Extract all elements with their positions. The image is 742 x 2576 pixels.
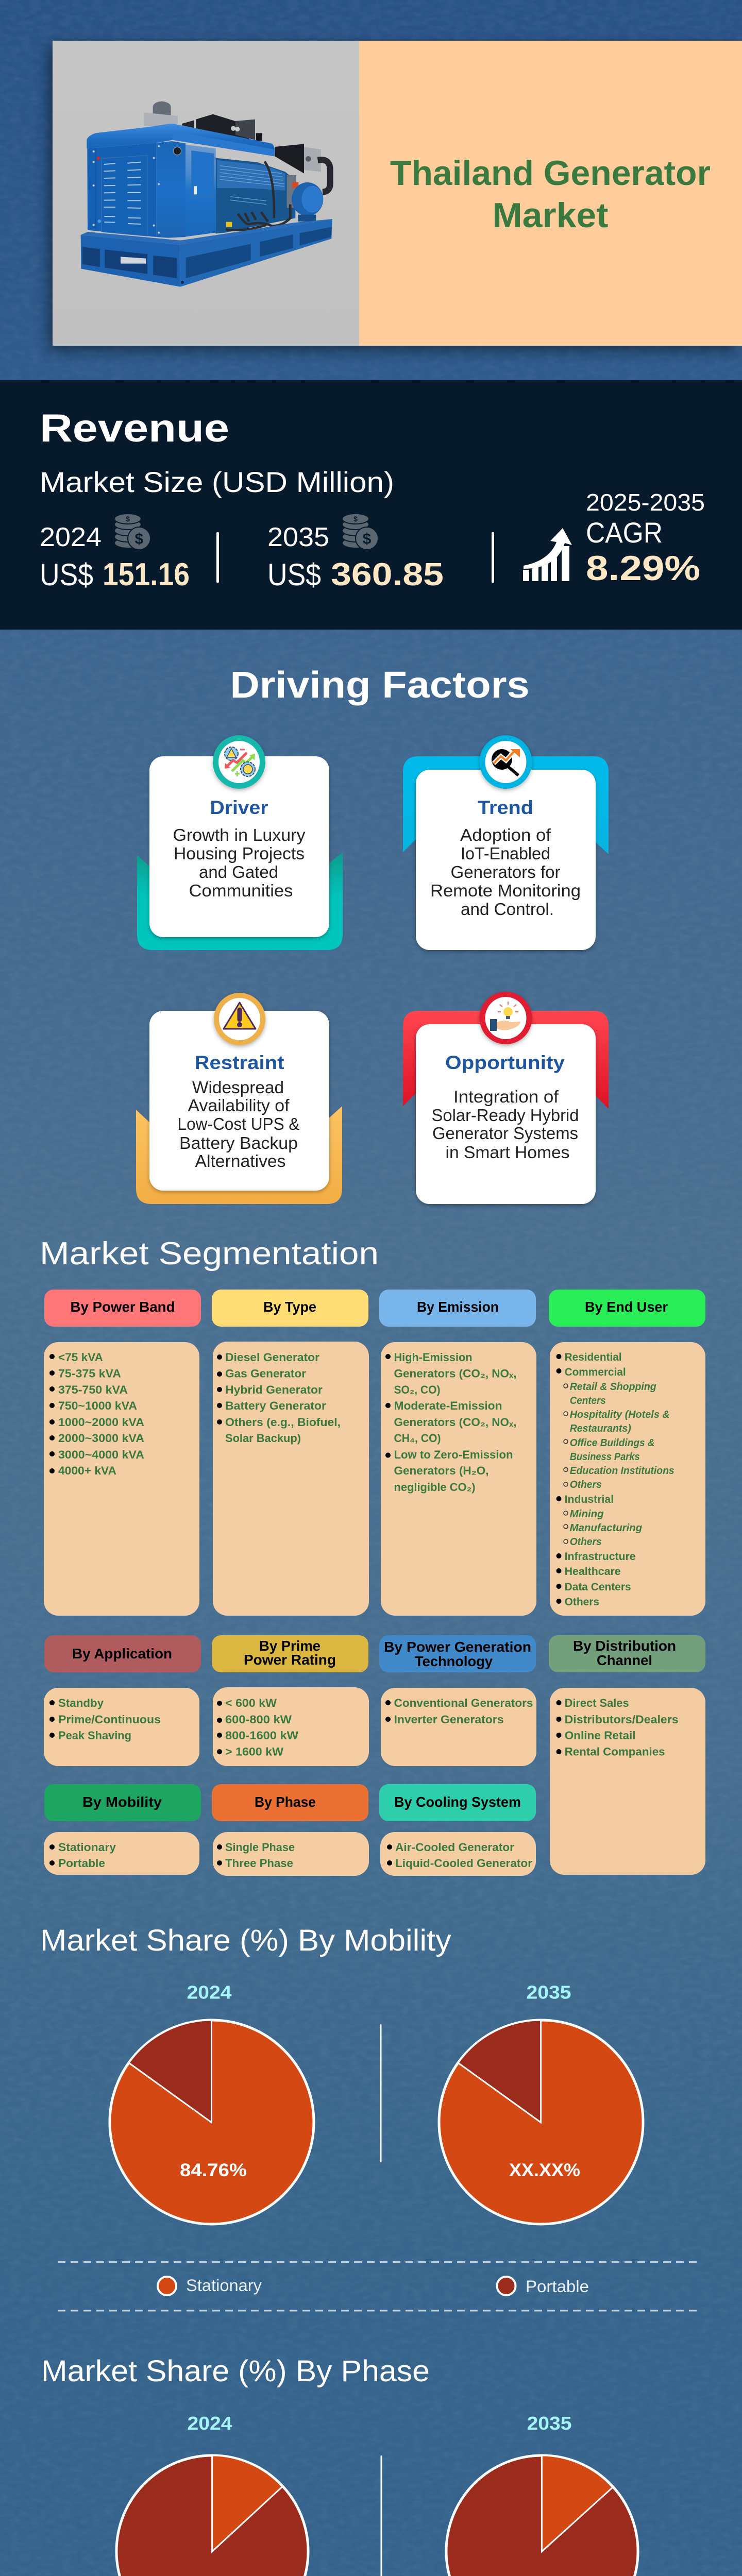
chart: mobility 2024 pie: 2024	[187, 1981, 232, 2003]
heading: market segmentation: Market Segmentation	[40, 1236, 379, 1272]
segment: by distribution channel: Distributors/Dealers	[565, 1713, 679, 1726]
segment: by power band: 1000~2000 kVA	[58, 1416, 144, 1429]
segment: by cooling system: Liquid-Cooled Generator	[395, 1857, 532, 1870]
icon: warning triangle	[214, 993, 265, 1045]
card text: Alternatives	[195, 1151, 285, 1171]
hero image panel	[53, 41, 742, 346]
segment: by type: Battery Generator	[225, 1399, 326, 1412]
skid base	[81, 219, 332, 245]
chart: mobility 2024 pie: 84.76%	[180, 2160, 247, 2180]
segment: by prime power rating: 600-800 kW	[225, 1713, 292, 1726]
illustration: blue diesel generator	[81, 101, 332, 287]
card text: Widespread	[192, 1078, 284, 1097]
segment: by application	[44, 1635, 201, 1766]
segment: by end user: Others	[570, 1479, 602, 1490]
engine block	[216, 158, 295, 233]
segment: by type: Solar Backup)	[225, 1432, 301, 1445]
icon: coins 2035	[342, 514, 378, 550]
segment: by distribution channel: Rental Companies	[565, 1745, 665, 1758]
card text: Adoption of	[460, 825, 551, 844]
stat: 2024: 151.16	[103, 557, 190, 592]
segment: by application: Peak Shaving	[58, 1729, 131, 1742]
segment: by end user: Mining	[570, 1509, 604, 1520]
segment: by emission: Moderate-Emission	[394, 1399, 502, 1412]
segment: by emission: negligible CO₂)	[394, 1481, 475, 1494]
segment: by end user: Data Centers	[565, 1581, 631, 1593]
subheading: market size: Market Size (USD Million)	[40, 466, 394, 498]
segment: by power band: By Power Band	[70, 1299, 175, 1315]
segment: by cooling system	[379, 1784, 536, 1876]
icon: trend magnifier	[479, 735, 532, 789]
segment: by power generation technology: Conventional Generators	[394, 1697, 533, 1709]
segment: by mobility: Portable	[58, 1857, 105, 1870]
divider	[380, 2455, 382, 2576]
segment: by power band: <75 kVA	[58, 1351, 103, 1364]
legend: mobility: Portable	[526, 2277, 589, 2296]
heading: market share by mobility: Market Share (%) By Mobility	[40, 1924, 451, 1957]
icon: coins 2024: $	[126, 515, 130, 523]
segment: by end user: Office Buildings &	[570, 1437, 655, 1449]
segment: by emission: By Emission	[417, 1299, 499, 1315]
segment: by power band: 3000~4000 kVA	[58, 1448, 144, 1461]
divider	[380, 2024, 381, 2162]
segment: by prime power rating: 800-1600 kW	[225, 1729, 298, 1742]
segment: by power band: 2000~3000 kVA	[58, 1432, 144, 1445]
divider	[492, 532, 494, 583]
card text: Integration of	[453, 1087, 559, 1106]
card text	[173, 825, 306, 900]
panel: restraint	[136, 993, 342, 1204]
segment: by power generation technology: By Power Generation	[384, 1639, 531, 1655]
heading: market share by phase: Market Share (%) By Phase	[41, 2354, 430, 2388]
card text	[432, 1087, 579, 1162]
segment: by power band: 750~1000 kVA	[58, 1399, 137, 1412]
segment: by end user: Industrial	[565, 1494, 614, 1505]
panel: revenue	[0, 380, 742, 630]
card text	[430, 825, 581, 919]
segment: by distribution channel: Channel	[597, 1652, 652, 1668]
card text: and Gated	[199, 862, 278, 882]
segment: by end user: Restaurants)	[570, 1423, 631, 1434]
stat: 2024: 2024	[40, 522, 102, 552]
card text: Battery Backup	[179, 1133, 298, 1153]
stat: 2035	[267, 522, 444, 592]
card text	[177, 1078, 300, 1171]
chart: phase 2035 pie	[446, 2413, 638, 2576]
panel: driver	[137, 735, 343, 950]
card text: in Smart Homes	[445, 1143, 570, 1162]
segment: by type: Hybrid Generator	[225, 1383, 323, 1396]
segment: by phase: Single Phase	[225, 1841, 295, 1854]
card text: Generator Systems	[432, 1124, 578, 1143]
icon: coins 2035: $	[353, 515, 358, 523]
segment: by power band	[44, 1290, 201, 1616]
segment: by cooling system: By Cooling System	[394, 1794, 521, 1810]
title: Market	[493, 196, 608, 235]
segment: by distribution channel	[549, 1635, 705, 1875]
segment: by power generation technology	[379, 1635, 536, 1766]
heading: driving factors: Driving Factors	[230, 665, 530, 706]
segment: by emission: Generators (CO₂, NOₓ,	[394, 1367, 516, 1380]
card text: Low-Cost UPS &	[177, 1114, 300, 1133]
segment: by emission: SO₂, CO)	[394, 1383, 440, 1396]
segment: by end user: Education Institutions	[570, 1465, 674, 1477]
card text: Remote Monitoring	[430, 881, 581, 900]
segment: by application: Standby	[58, 1697, 104, 1709]
card text: Communities	[189, 881, 293, 900]
chart: mobility 2024 pie	[110, 1981, 314, 2224]
icon: driver arrows and gears	[213, 735, 265, 789]
segment: by type: By Type	[263, 1299, 316, 1315]
segment: by phase: Three Phase	[225, 1857, 293, 1870]
segment: by emission: Generators (CO₂, NOₓ,	[394, 1416, 516, 1429]
stat: CAGR: CAGR	[586, 516, 663, 549]
vents	[104, 162, 141, 224]
heading: revenue: Revenue	[40, 406, 229, 450]
segment: by type	[212, 1290, 369, 1616]
segment: by end user: Residential	[565, 1351, 622, 1363]
chart: mobility 2035 pie: 2035	[527, 1981, 571, 2003]
segment: by mobility	[44, 1784, 201, 1875]
divider	[216, 532, 219, 583]
chart: mobility 2035 pie	[439, 1981, 643, 2224]
card title: Trend	[478, 797, 533, 818]
icon: coins 2024: $	[135, 531, 144, 548]
icon: growth chart arrow	[523, 528, 572, 581]
top equipment	[153, 101, 171, 115]
segment: by emission: CH₄, CO)	[394, 1432, 441, 1445]
segment: by distribution channel: Online Retail	[565, 1729, 636, 1742]
segment: by type: Diesel Generator	[225, 1351, 319, 1364]
segment: by end user: Others	[565, 1596, 599, 1608]
legend: mobility: Stationary	[186, 2276, 262, 2295]
segment: by power generation technology: Inverter Generators	[394, 1713, 504, 1726]
segment: by end user: Centers	[570, 1395, 606, 1406]
segment: by mobility: Stationary	[58, 1841, 116, 1854]
icon: coins 2024	[114, 514, 150, 550]
segment: by prime power rating: > 1600 kW	[225, 1745, 283, 1758]
segment: by type: Gas Generator	[225, 1367, 306, 1380]
segment: by end user: Retail & Shopping	[570, 1381, 656, 1393]
chart: phase 2035 pie: 2035	[527, 2413, 572, 2434]
segment: by power band: 4000+ kVA	[58, 1464, 116, 1477]
segment: by distribution channel: Direct Sales	[565, 1697, 629, 1709]
details	[173, 147, 181, 155]
chart: mobility 2035 pie: XX.XX%	[509, 2160, 580, 2180]
segment: by power band: 375-750 kVA	[58, 1383, 128, 1396]
panel: opportunity	[403, 992, 609, 1204]
stat: 2035: 2035	[267, 522, 329, 552]
card title: Driver	[210, 797, 268, 818]
segment: by end user: Infrastructure	[565, 1551, 636, 1563]
segment: by end user: Healthcare	[565, 1566, 621, 1578]
enclosure	[87, 143, 156, 237]
card title: Restraint	[195, 1052, 284, 1073]
segment: by end user: Manufacturing	[570, 1522, 642, 1534]
card text: Solar-Ready Hybrid	[432, 1106, 579, 1125]
segment: by phase	[212, 1784, 369, 1876]
segment: by emission	[379, 1290, 536, 1616]
stat: 2035: US$	[267, 557, 321, 592]
segment: by prime power rating: By Prime	[259, 1638, 321, 1654]
card text: Availability of	[188, 1096, 290, 1115]
segment: by end user: Hospitality (Hotels &	[570, 1409, 670, 1420]
card text: Housing Projects	[174, 844, 305, 863]
segment: by end user: Others	[570, 1536, 602, 1548]
segment: by type: Others (e.g., Biofuel,	[225, 1416, 341, 1429]
panel: trend	[403, 735, 609, 950]
segment: by prime power rating	[212, 1635, 369, 1766]
icon: coins 2035: $	[363, 531, 372, 548]
segment: by prime power rating: < 600 kW	[225, 1697, 277, 1709]
stat: 2035: 360.85	[331, 557, 444, 592]
segment: by end user	[549, 1290, 705, 1616]
legend: mobility	[58, 2262, 700, 2311]
stat: CAGR	[586, 489, 705, 588]
segment: by phase: By Phase	[255, 1794, 316, 1810]
segment: by application: By Application	[72, 1646, 172, 1662]
segment: by application: Prime/Continuous	[58, 1713, 161, 1726]
segment: by power generation technology: Technology	[415, 1653, 493, 1669]
panel: hero	[53, 41, 742, 346]
hoses	[226, 161, 290, 230]
segment: by emission: Low to Zero-Emission	[394, 1448, 513, 1461]
stat: 2024	[40, 522, 190, 592]
segment: by end user: By End User	[585, 1299, 668, 1315]
stat: CAGR: 8.29%	[586, 549, 700, 588]
segment: by prime power rating: Power Rating	[244, 1652, 336, 1668]
icon: hand with light bulb	[479, 992, 532, 1044]
chart: phase 2024 pie: 2024	[188, 2413, 232, 2434]
segment: by emission: High-Emission	[394, 1351, 472, 1364]
roof	[87, 124, 275, 156]
card title: Opportunity	[445, 1052, 565, 1073]
segment: by distribution channel: By Distribution	[573, 1638, 676, 1654]
segment: by emission: Generators (H₂O,	[394, 1464, 488, 1477]
rear radiator and pipe	[275, 144, 304, 174]
stat: CAGR: 2025-2035	[586, 489, 705, 516]
alternator	[292, 182, 323, 216]
card text: Growth in Luxury	[173, 825, 306, 844]
card text: and Control.	[461, 900, 554, 919]
title: Thailand Generator	[390, 154, 711, 193]
stat: 2024: US$	[40, 557, 93, 592]
segment: by power band: 75-375 kVA	[58, 1367, 121, 1380]
card text: Generators for	[450, 862, 561, 882]
chart: phase 2024 pie	[116, 2413, 308, 2576]
segment: by mobility: By Mobility	[82, 1794, 162, 1810]
segment: by end user: Business Parks	[570, 1451, 640, 1463]
title	[390, 154, 711, 235]
segment: by end user: Commercial	[565, 1366, 626, 1378]
card text: IoT-Enabled	[461, 844, 550, 863]
segment: by cooling system: Air-Cooled Generator	[395, 1841, 514, 1854]
